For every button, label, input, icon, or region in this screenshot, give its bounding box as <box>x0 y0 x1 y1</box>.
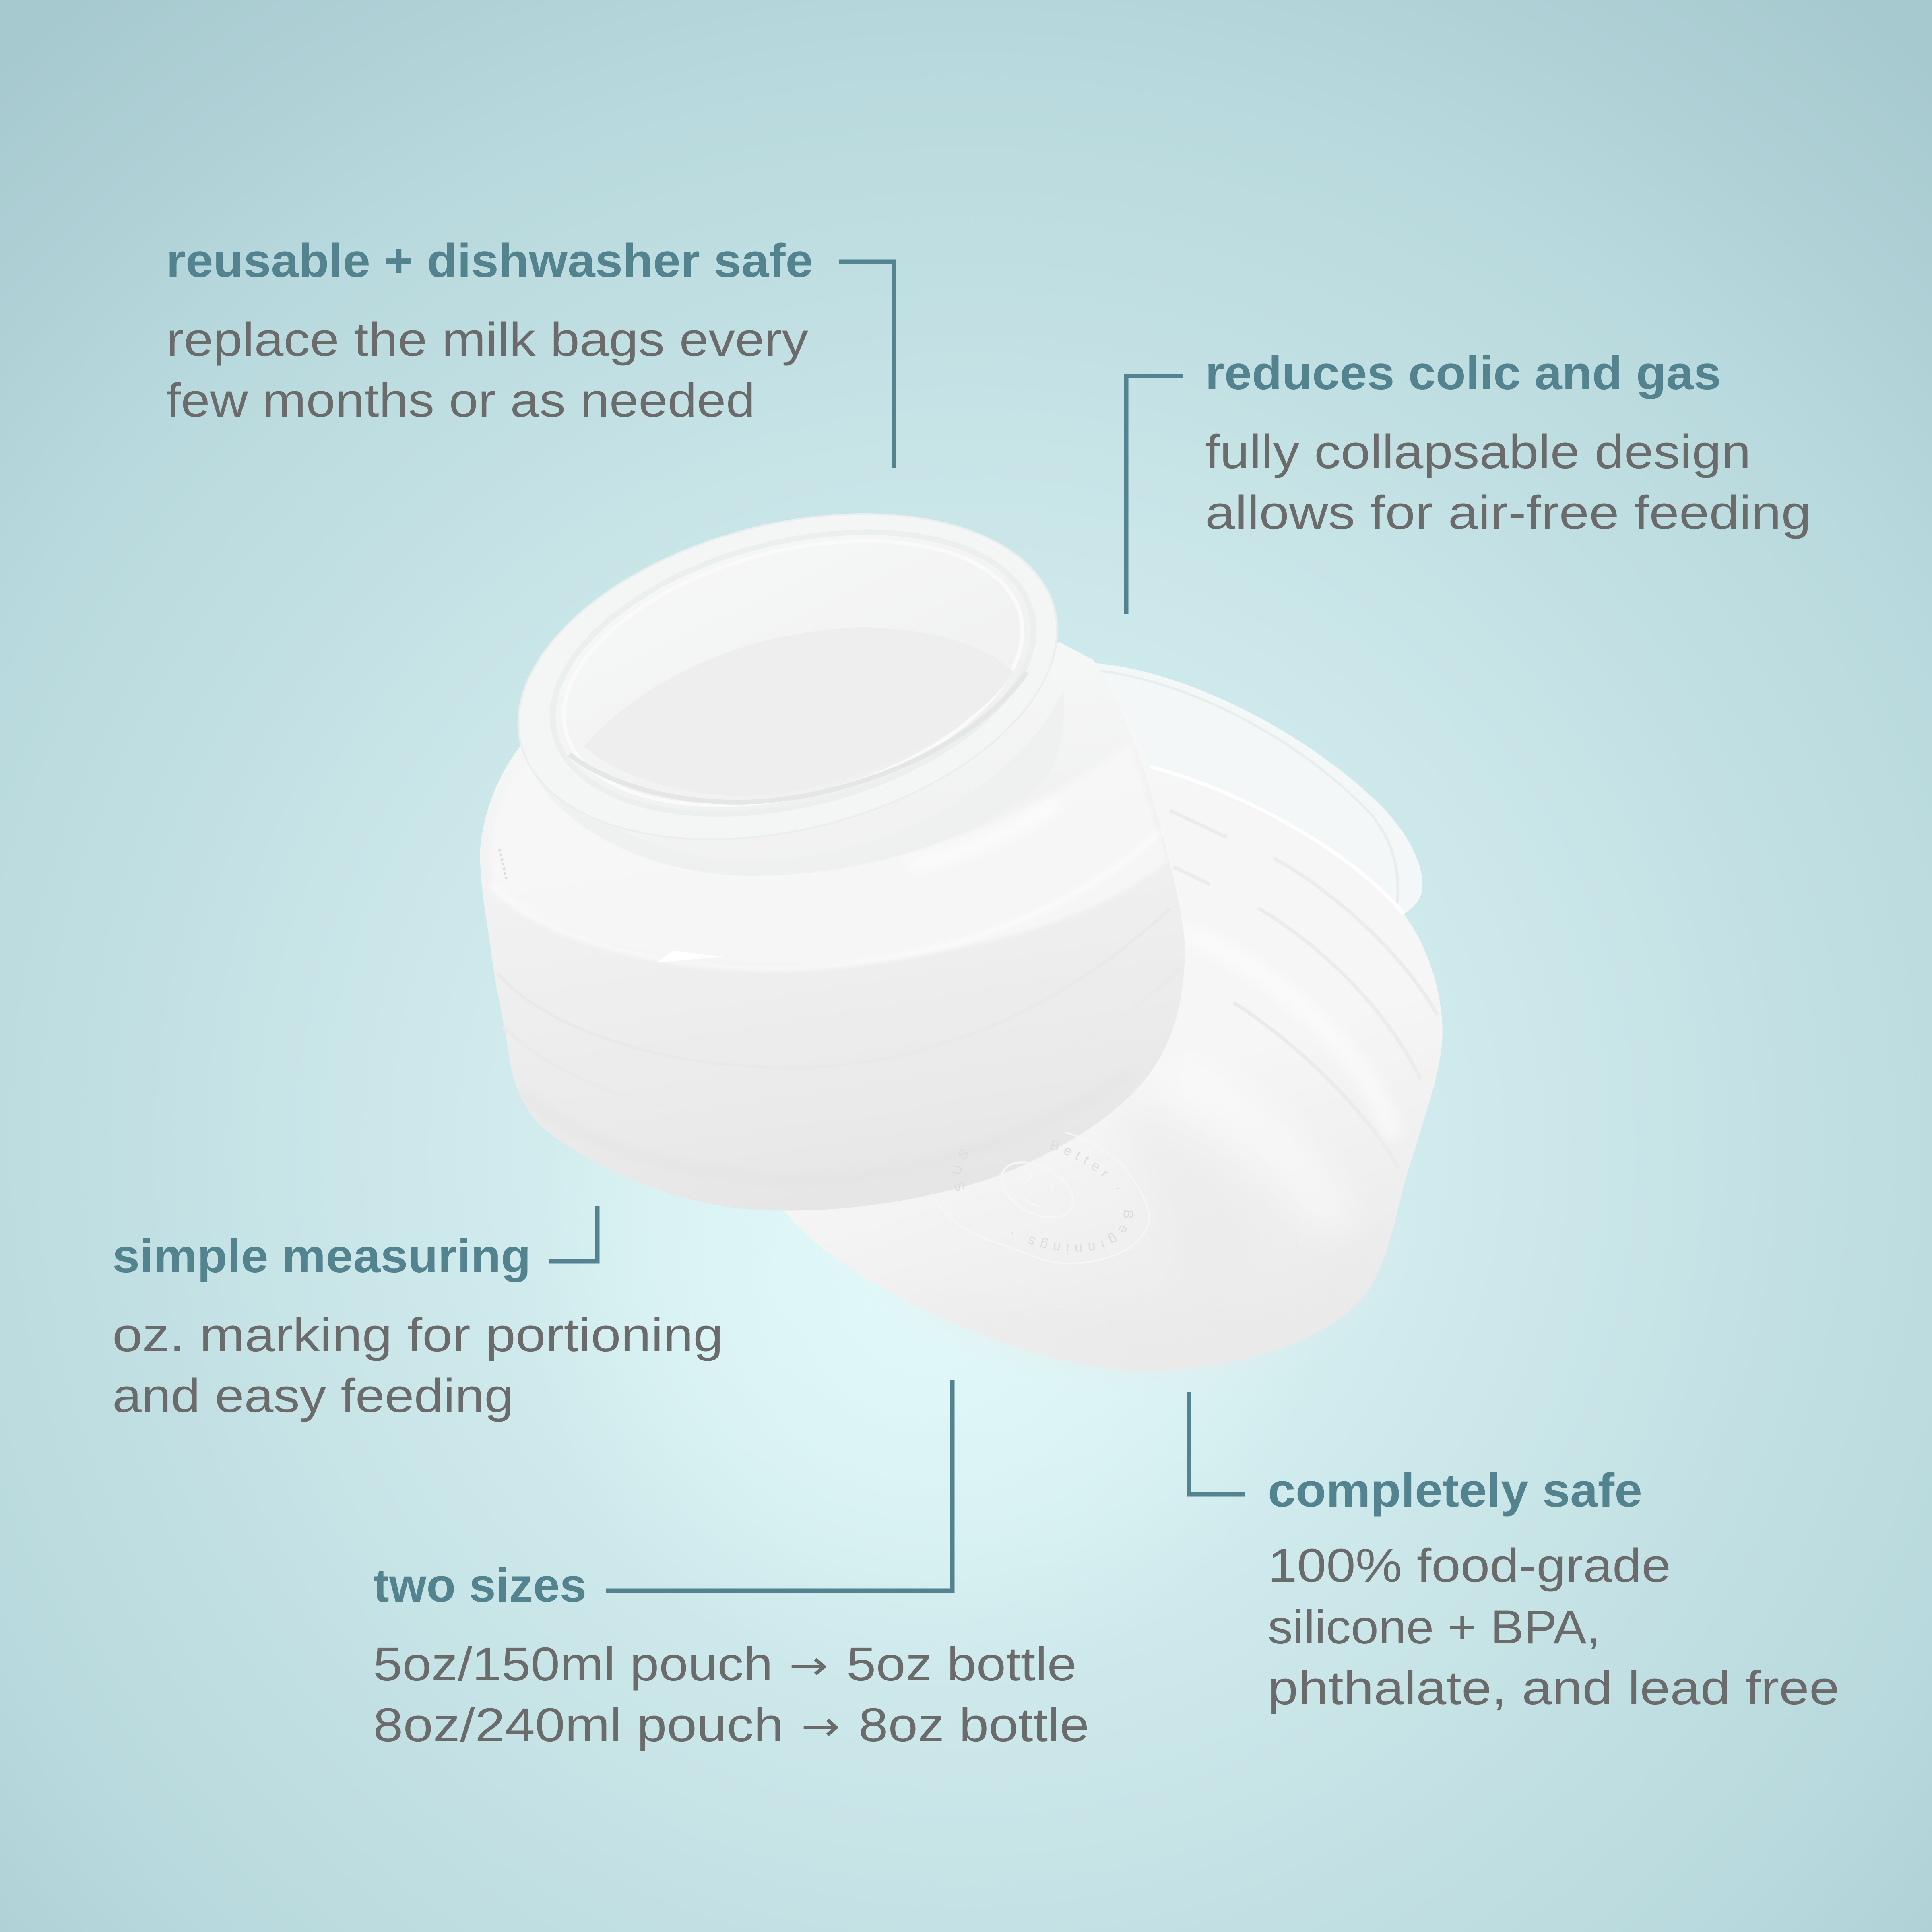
body text: and easy feeding <box>112 1369 514 1422</box>
side volume marks <box>500 849 506 879</box>
emblem lettering: Beginnings · <box>1002 1209 1136 1257</box>
leader line <box>839 262 894 468</box>
body text: fully collapsable design <box>1205 425 1751 479</box>
heading: two sizes <box>373 1559 586 1612</box>
emblem lettering: SUS <box>949 1142 976 1193</box>
leader line <box>1189 1392 1245 1494</box>
jar bands <box>497 908 1170 1067</box>
leader line <box>606 1380 952 1591</box>
body text: 5oz bottle <box>846 1638 1077 1691</box>
leader line <box>549 1206 597 1261</box>
rear ribs <box>1150 766 1404 914</box>
body text: 8oz bottle <box>859 1699 1089 1752</box>
emblem lettering: Better · <box>1048 1137 1129 1199</box>
background glow <box>483 886 1368 1690</box>
emblem lettering <box>949 1137 1136 1257</box>
callout: reduces colic and gas <box>1126 347 1811 614</box>
jar interior floor <box>584 627 1013 796</box>
heading: completely safe <box>1268 1464 1642 1517</box>
product illustration: silicone pouch holders <box>471 457 1443 1371</box>
body text: 100% food-grade <box>1268 1539 1671 1592</box>
body text: silicone + BPA, <box>1268 1601 1600 1654</box>
shoulder highlight <box>491 743 1167 964</box>
heading: reduces colic and gas <box>1205 347 1721 400</box>
body text <box>112 1309 723 1422</box>
body text: few months or as needed <box>166 374 755 427</box>
body text <box>1205 425 1811 539</box>
body text: allows for air-free feeding <box>1205 486 1811 539</box>
body text: oz. marking for portioning <box>112 1309 723 1362</box>
emblem smiley circle <box>992 1151 1082 1228</box>
body text: replace the milk bags every <box>166 313 808 366</box>
callout: simple measuring <box>112 1206 723 1422</box>
front jar body <box>480 642 1185 1211</box>
embossed brand emblem <box>932 1132 1149 1263</box>
rear funnel holder <box>783 663 1443 1371</box>
body text: → <box>789 1642 828 1689</box>
callout: two sizes <box>373 1380 1089 1752</box>
body text <box>373 1638 1089 1752</box>
body text: 8oz/240ml pouch <box>373 1699 784 1752</box>
dome shading <box>870 1097 1390 1368</box>
callout: reusable + dishwasher safe <box>166 234 894 468</box>
body text: phthalate, and lead free <box>1268 1662 1839 1715</box>
heading: simple measuring <box>112 1230 531 1283</box>
callout: completely safe <box>1189 1392 1839 1715</box>
body text <box>166 313 808 427</box>
leader line <box>1126 376 1183 614</box>
jar neck rim <box>471 457 1104 896</box>
body text: → <box>801 1703 840 1750</box>
rear rim band <box>1094 663 1422 914</box>
heading: reusable + dishwasher safe <box>166 234 813 287</box>
body text: 5oz/150ml pouch <box>373 1638 773 1691</box>
body text <box>1268 1539 1839 1715</box>
